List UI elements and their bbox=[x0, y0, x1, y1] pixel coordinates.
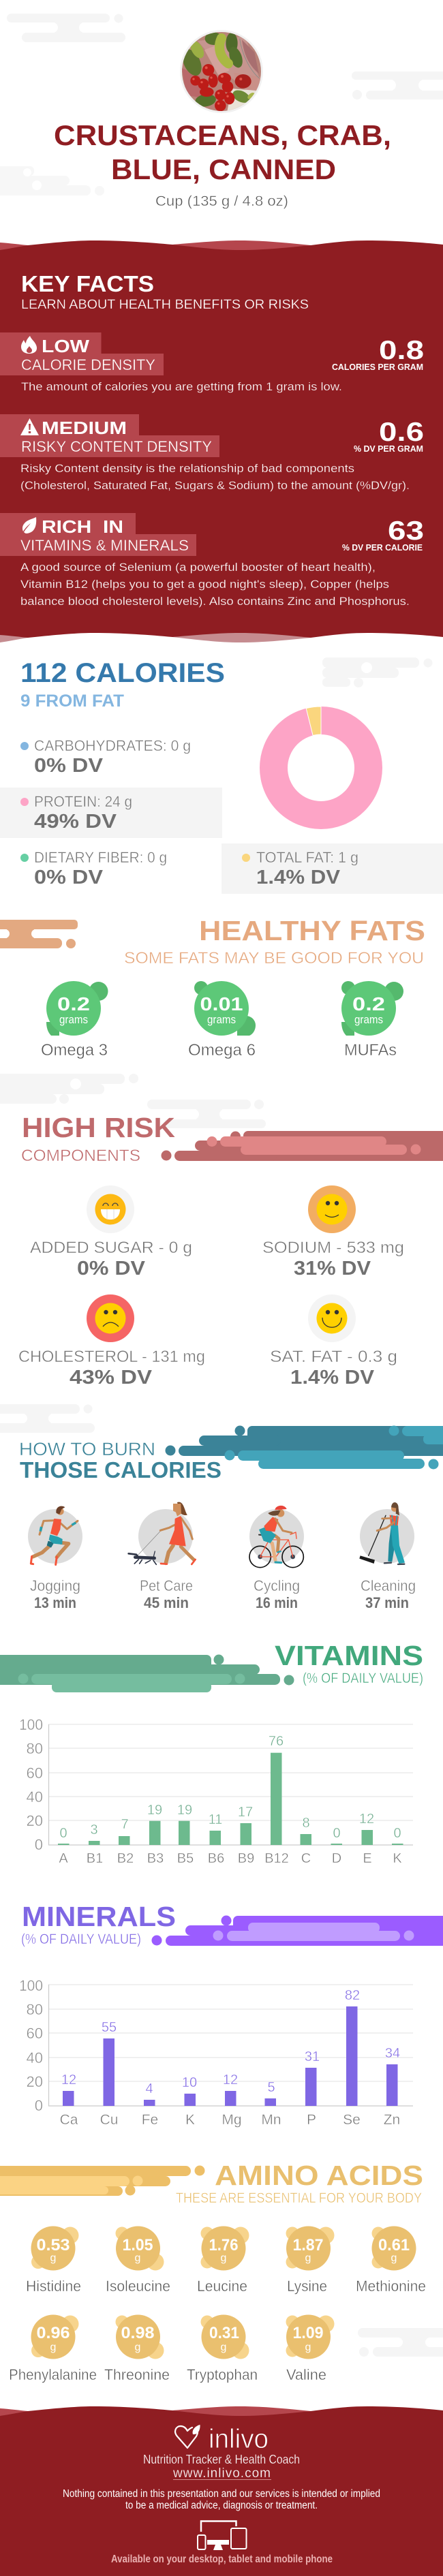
fact: low calorie density: LOW bbox=[42, 336, 90, 356]
omega 6: grams bbox=[207, 1013, 236, 1026]
calories heading bbox=[20, 658, 225, 711]
sodium: SODIUM - 533 mg bbox=[262, 1239, 404, 1257]
minerals bar chart: Cu bbox=[100, 2112, 118, 2128]
minerals bar chart: 0 bbox=[35, 2097, 43, 2114]
amino acid: methionine: g bbox=[391, 2252, 397, 2264]
icon: sweeper bbox=[359, 1502, 405, 1564]
burn heading: THOSE CALORIES bbox=[20, 1457, 222, 1483]
mufas: grams bbox=[354, 1013, 383, 1026]
food photo bbox=[180, 30, 263, 113]
mufas: 0.2 bbox=[352, 993, 385, 1014]
amino acid: leucine: g bbox=[221, 2252, 226, 2264]
healthy fats decoration bbox=[0, 920, 78, 948]
minerals bar chart: Se bbox=[343, 2112, 361, 2128]
amino acid: histidine: 0.53 bbox=[37, 2236, 70, 2254]
fact: low calorie density: 0.8 bbox=[379, 336, 424, 365]
vitamins bar chart: C bbox=[301, 1851, 311, 1866]
vitamins bar chart: 60 bbox=[27, 1765, 43, 1782]
disclaimer bbox=[63, 2488, 380, 2511]
omega 3: 0.2 bbox=[57, 993, 90, 1014]
fact: medium risky content density: MEDIUM bbox=[42, 418, 127, 438]
amino acid: threonine: Threonine bbox=[104, 2366, 170, 2383]
sodium bbox=[262, 1185, 404, 1279]
vitamins bar chart: B2 bbox=[117, 1851, 134, 1866]
legend: total fat: 1.4% DV bbox=[256, 867, 341, 888]
calories heading: 9 FROM FAT bbox=[20, 692, 124, 711]
minerals bar chart: Zn bbox=[384, 2112, 400, 2128]
amino acid: methionine: Methionine bbox=[356, 2278, 426, 2295]
icon: heart with leaf bbox=[175, 2425, 200, 2448]
background cloud left of title bbox=[0, 166, 104, 196]
minerals bar chart: 12 bbox=[61, 2073, 76, 2088]
activity: pet care: 45 min bbox=[144, 1594, 189, 1611]
legend: carbohydrates: 0% DV bbox=[34, 755, 104, 777]
vitamins bar chart: D bbox=[332, 1851, 341, 1866]
burn decoration bbox=[165, 1425, 443, 1469]
title: BLUE, CANNED bbox=[111, 153, 336, 185]
amino acid: isoleucine: 1.05 bbox=[123, 2236, 153, 2254]
amino acid: lysine bbox=[286, 2226, 334, 2295]
minerals bar chart: Mg bbox=[222, 2112, 242, 2128]
omega 6: 0.01 bbox=[200, 993, 243, 1014]
activity: jogging: Jogging bbox=[30, 1577, 80, 1594]
fact: medium risky content density: 0.6 bbox=[379, 418, 424, 447]
activity: cleaning bbox=[359, 1502, 416, 1611]
icon: devices bbox=[198, 2521, 247, 2550]
high risk heading: COMPONENTS bbox=[21, 1147, 140, 1165]
background cloud burn bbox=[0, 1404, 95, 1433]
minerals bar chart: Ca bbox=[60, 2112, 78, 2128]
legend: dietary fiber bbox=[20, 849, 167, 888]
footer tagline: Nutrition Tracker & Health Coach bbox=[143, 2453, 300, 2466]
panel: footer background bbox=[0, 2406, 443, 2576]
vitamins bar chart: 76 bbox=[269, 1734, 284, 1749]
amino acid: isoleucine: Isoleucine bbox=[106, 2278, 170, 2295]
vitamins bar chart: B5 bbox=[177, 1851, 194, 1866]
donut chart bbox=[274, 707, 368, 815]
minerals bar chart: 31 bbox=[305, 2049, 320, 2064]
amino acid: histidine: g bbox=[50, 2252, 56, 2264]
minerals bar chart: 55 bbox=[102, 2020, 117, 2035]
vitamins bar chart: 0 bbox=[333, 1826, 341, 1841]
vitamins bar chart: B3 bbox=[147, 1851, 164, 1866]
mufas: MUFAs bbox=[344, 1041, 397, 1059]
saturated fat bbox=[270, 1294, 397, 1388]
minerals heading: MINERALS bbox=[22, 1901, 176, 1932]
fact: medium risky content density: RISKY CONTENT DENSITY bbox=[21, 438, 212, 455]
sodium: 31% DV bbox=[294, 1258, 371, 1279]
amino acid: tryptophan: g bbox=[221, 2342, 226, 2353]
minerals bar chart: 60 bbox=[27, 2025, 43, 2042]
minerals bar chart: 20 bbox=[27, 2073, 43, 2090]
fact: medium risky content density bbox=[0, 414, 424, 492]
vitamins heading: VITAMINS bbox=[275, 1640, 423, 1671]
amino acid: tryptophan: 0.31 bbox=[209, 2324, 239, 2342]
legend: carbohydrates bbox=[20, 737, 191, 777]
fact: rich in vitamins and minerals bbox=[0, 513, 424, 608]
fact: low calorie density: The amount of calories you are getting from 1 gram is low. bbox=[21, 380, 342, 393]
vitamins bar chart: E bbox=[363, 1851, 372, 1866]
healthy fats heading: SOME FATS MAY BE GOOD FOR YOU bbox=[124, 949, 424, 967]
minerals heading: (% OF DAILY VALUE) bbox=[21, 1931, 141, 1947]
cholesterol: CHOLESTEROL - 131 mg bbox=[18, 1348, 205, 1366]
added sugar: 0% DV bbox=[77, 1258, 146, 1279]
vitamins bar chart: K bbox=[393, 1851, 402, 1866]
vitamins bar chart: 3 bbox=[90, 1822, 98, 1837]
vitamins bar chart: B1 bbox=[87, 1851, 103, 1866]
fact: low calorie density: CALORIE DENSITY bbox=[21, 356, 155, 373]
amino acid: methionine: 0.61 bbox=[378, 2236, 410, 2254]
amino acid: isoleucine bbox=[106, 2226, 170, 2295]
logo: inlivo: inlivo bbox=[209, 2424, 269, 2454]
icon: leaf bbox=[22, 517, 36, 533]
amino acids heading: AMINO ACIDS bbox=[215, 2160, 423, 2191]
amino acid: tryptophan bbox=[187, 2315, 258, 2383]
vitamins bar chart: 80 bbox=[27, 1740, 43, 1757]
omega 3 bbox=[41, 981, 108, 1059]
minerals bar chart: 80 bbox=[27, 2001, 43, 2018]
key facts heading: LEARN ABOUT HEALTH BENEFITS OR RISKS bbox=[21, 298, 309, 312]
amino acid: histidine bbox=[26, 2226, 81, 2295]
minerals bar chart: 40 bbox=[27, 2049, 43, 2066]
amino acids decoration bbox=[0, 2165, 204, 2196]
background clouds high risk bbox=[0, 1074, 266, 1128]
vitamins bar chart: 20 bbox=[27, 1812, 43, 1829]
amino acid: leucine: 1.76 bbox=[209, 2236, 239, 2254]
activity: pet care bbox=[129, 1502, 196, 1611]
burn heading bbox=[19, 1439, 222, 1483]
fact: rich in vitamins and minerals: % DV PER CALORIE bbox=[342, 542, 423, 553]
amino acid: phenylalanine: Phenylalanine bbox=[9, 2366, 97, 2383]
high risk decoration bbox=[161, 1131, 443, 1161]
icon: cyclist bbox=[249, 1506, 303, 1568]
vitamins bar chart: 8 bbox=[302, 1816, 310, 1831]
minerals bar chart: 10 bbox=[182, 2075, 197, 2090]
omega 3: grams bbox=[59, 1013, 88, 1026]
vitamins bar chart bbox=[19, 1716, 413, 1866]
minerals bar chart: K bbox=[185, 2112, 195, 2128]
background cloud amino acids bbox=[358, 2328, 443, 2357]
key facts heading: KEY FACTS bbox=[21, 271, 154, 296]
activity: cycling: Cycling bbox=[254, 1577, 300, 1594]
vitamins bar chart: B6 bbox=[208, 1851, 224, 1866]
amino acid: leucine: Leucine bbox=[197, 2278, 247, 2295]
amino acid: valine: Valine bbox=[286, 2366, 326, 2383]
vitamins bar chart: 17 bbox=[238, 1805, 253, 1820]
added sugar: ADDED SUGAR - 0 g bbox=[30, 1239, 192, 1257]
burn heading: HOW TO BURN bbox=[19, 1439, 155, 1459]
added sugar bbox=[30, 1185, 192, 1279]
minerals bar chart: Fe bbox=[142, 2112, 158, 2128]
fact: rich in vitamins and minerals: A good source of Selenium (a powerful booster of heart health), bbox=[20, 561, 376, 574]
omega 6 bbox=[188, 981, 256, 1059]
serving size: Cup (135 g / 4.8 oz) bbox=[155, 193, 288, 209]
activity: jogging: 13 min bbox=[34, 1594, 76, 1611]
omega 6: Omega 6 bbox=[188, 1041, 256, 1059]
high risk heading: HIGH RISK bbox=[22, 1112, 175, 1143]
fact: low calorie density bbox=[0, 332, 424, 393]
amino acid: methionine bbox=[356, 2226, 426, 2295]
background cloud top right bbox=[352, 72, 443, 99]
vitamins bar chart: 7 bbox=[121, 1817, 129, 1832]
fact: rich in vitamins and minerals: RICH IN bbox=[42, 516, 123, 537]
minerals bar chart: Mn bbox=[261, 2112, 281, 2128]
saturated fat: 1.4% DV bbox=[290, 1367, 375, 1388]
fact: rich in vitamins and minerals: VITAMINS & MINERALS bbox=[20, 537, 189, 554]
background cloud top left bbox=[7, 14, 125, 42]
amino acid: phenylalanine: 0.96 bbox=[37, 2324, 70, 2342]
legend: dietary fiber: DIETARY FIBER: 0 g bbox=[34, 849, 167, 866]
amino acid: valine: 1.09 bbox=[293, 2324, 323, 2342]
amino acid: phenylalanine bbox=[9, 2315, 97, 2383]
vitamins bar chart: 40 bbox=[27, 1788, 43, 1805]
amino acid: threonine bbox=[104, 2315, 170, 2383]
icon: flame bbox=[21, 336, 37, 354]
activity: cleaning: Cleaning bbox=[361, 1577, 416, 1594]
title: CRUSTACEANS, CRAB, bbox=[54, 119, 391, 151]
mufas bbox=[341, 981, 403, 1059]
amino acid: isoleucine: g bbox=[135, 2252, 140, 2264]
vitamins bar chart: 12 bbox=[359, 1812, 374, 1827]
high risk heading bbox=[21, 1112, 175, 1165]
omega 3: Omega 3 bbox=[41, 1041, 108, 1059]
amino acid: lysine: Lysine bbox=[287, 2278, 327, 2295]
calories heading: 112 CALORIES bbox=[20, 658, 225, 688]
fact: rich in vitamins and minerals: 63 bbox=[388, 516, 424, 546]
activity: jogging bbox=[28, 1506, 82, 1611]
amino acid: tryptophan: Tryptophan bbox=[187, 2366, 258, 2383]
amino acid: leucine bbox=[197, 2226, 249, 2295]
vitamins heading bbox=[275, 1640, 423, 1686]
vitamins bar chart: B12 bbox=[264, 1851, 289, 1866]
minerals decoration bbox=[151, 1916, 443, 1946]
vitamins decoration bbox=[0, 1654, 294, 1692]
vitamins bar chart: 0 bbox=[59, 1826, 67, 1841]
vitamins bar chart: 100 bbox=[19, 1716, 43, 1733]
amino acids heading bbox=[176, 2160, 423, 2206]
vitamins heading: (% OF DAILY VALUE) bbox=[303, 1671, 423, 1686]
legend: total fat bbox=[222, 843, 443, 894]
fact: medium risky content density: (Cholesterol, Saturated Fat, Sugars & Sodium) to the amount (%DV/gr). bbox=[20, 479, 410, 492]
fact: rich in vitamins and minerals: balance blood cholesterol levels). Also contains Zinc and Phosphorus. bbox=[20, 595, 410, 608]
background cloud calories bbox=[322, 657, 432, 687]
legend: total fat: TOTAL FAT: 1 g bbox=[256, 849, 358, 866]
vitamins bar chart: A bbox=[59, 1851, 68, 1866]
minerals bar chart: 82 bbox=[345, 1988, 360, 2003]
icon: warning triangle bbox=[20, 418, 39, 435]
fact: medium risky content density: % DV PER GRAM bbox=[354, 444, 423, 454]
activity: pet care: Pet Care bbox=[140, 1577, 193, 1594]
legend: dietary fiber: 0% DV bbox=[34, 867, 104, 888]
availability note: Available on your desktop, tablet and mobile phone bbox=[111, 2554, 333, 2565]
legend: protein: 49% DV bbox=[34, 811, 117, 833]
panel: key facts background bbox=[0, 240, 443, 654]
minerals bar chart: 12 bbox=[223, 2073, 238, 2088]
activity: cycling bbox=[249, 1506, 304, 1611]
amino acid: valine: g bbox=[305, 2342, 311, 2353]
title bbox=[54, 119, 391, 185]
icon: dog walker bbox=[129, 1502, 196, 1564]
icon: runner bbox=[31, 1506, 78, 1565]
fact: medium risky content density: Risky Content density is the relationship of bad components bbox=[20, 462, 354, 475]
healthy fats heading: HEALTHY FATS bbox=[199, 915, 425, 946]
vitamins bar chart: 19 bbox=[177, 1803, 192, 1818]
activity: cycling: 16 min bbox=[256, 1594, 298, 1611]
vitamins bar chart: 11 bbox=[209, 1812, 222, 1827]
cholesterol bbox=[18, 1294, 205, 1388]
amino acid: phenylalanine: g bbox=[50, 2342, 56, 2353]
key facts heading bbox=[21, 271, 309, 312]
legend: protein bbox=[0, 788, 222, 838]
disclaimer: Nothing contained in this presentation and our services is intended or implied bbox=[63, 2488, 380, 2500]
minerals bar chart: 100 bbox=[19, 1977, 43, 1994]
vitamins bar chart: 19 bbox=[147, 1803, 162, 1818]
healthy fats heading bbox=[124, 915, 425, 967]
amino acid: valine bbox=[286, 2315, 334, 2383]
vitamins bar chart: 0 bbox=[35, 1836, 43, 1853]
amino acid: lysine: g bbox=[305, 2252, 311, 2264]
amino acid: threonine: 0.98 bbox=[121, 2324, 154, 2342]
footer url: www.inlivo.com bbox=[172, 2466, 271, 2481]
logo: inlivo bbox=[175, 2424, 269, 2454]
cholesterol: 43% DV bbox=[70, 1367, 153, 1388]
minerals bar chart: P bbox=[307, 2112, 316, 2128]
amino acid: threonine: g bbox=[135, 2342, 140, 2353]
minerals bar chart: 34 bbox=[385, 2046, 400, 2061]
amino acid: histidine: Histidine bbox=[26, 2278, 81, 2295]
disclaimer: to be a medical advice, diagnosis or treatment. bbox=[125, 2500, 318, 2511]
fact: low calorie density: CALORIES PER GRAM bbox=[332, 362, 423, 372]
minerals bar chart: 4 bbox=[145, 2081, 153, 2096]
minerals heading bbox=[21, 1901, 176, 1947]
legend: carbohydrates: CARBOHYDRATES: 0 g bbox=[34, 737, 191, 754]
amino acid: lysine: 1.87 bbox=[293, 2236, 323, 2254]
saturated fat: SAT. FAT - 0.3 g bbox=[270, 1348, 397, 1366]
legend: protein: PROTEIN: 24 g bbox=[34, 793, 132, 810]
vitamins bar chart: B9 bbox=[238, 1851, 254, 1866]
fact: rich in vitamins and minerals: Vitamin B12 (helps you to get a good night's sleep), Copper (helps bbox=[20, 578, 389, 591]
minerals bar chart: 5 bbox=[267, 2080, 275, 2095]
activity: cleaning: 37 min bbox=[365, 1594, 409, 1611]
minerals bar chart bbox=[19, 1977, 413, 2128]
vitamins bar chart: 0 bbox=[393, 1826, 401, 1841]
